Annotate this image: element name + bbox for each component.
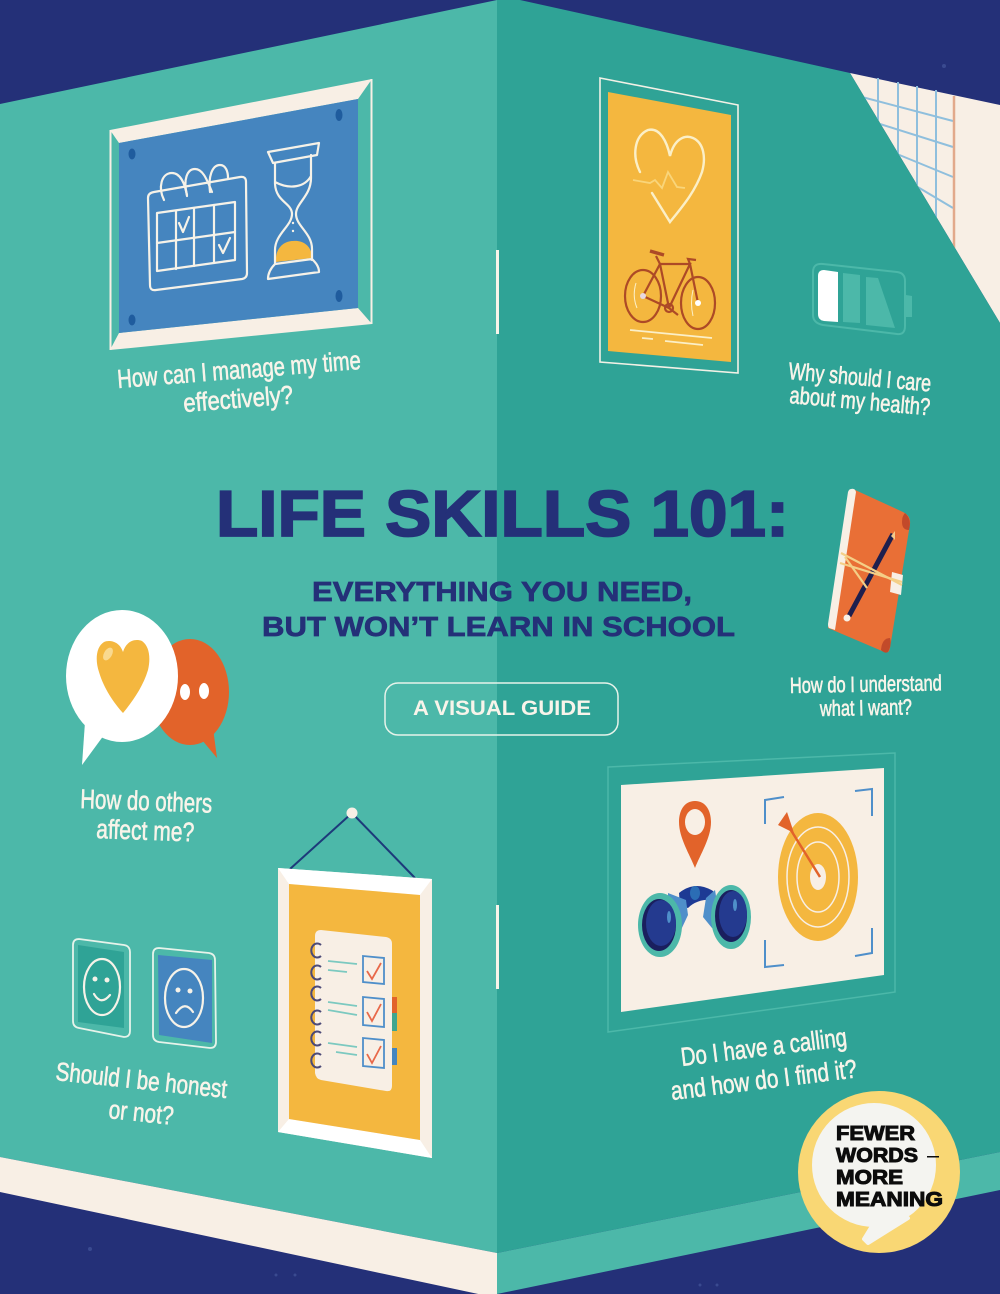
caption: others [80,784,213,847]
caption: what I want [790,670,942,721]
caption: what I want: How do I understand [790,670,942,698]
badge: fewer words more meaning [798,1091,960,1253]
caption: calling: and how do I find it? [669,1053,858,1106]
caption: time: How can I manage my time [116,345,362,394]
badge: fewer words more meaning: WORDS [836,1145,918,1167]
text lines [630,330,712,345]
color tabs [392,997,397,1065]
caption: health: Why should I care [787,358,932,397]
poster frame [608,753,895,1032]
caption: time: effectively? [182,379,294,418]
panel: calling poster [608,753,895,1032]
subtitle: EVERYTHING YOU NEED, [312,576,692,607]
caption: health [787,358,932,421]
subtitle: BUT WON’T LEARN IN SCHOOL [262,611,735,642]
caption: calling [669,1022,858,1106]
icon: speech bubbles [66,610,229,765]
panel: health poster [600,78,738,373]
caption: honest: Should I be honest [54,1056,229,1104]
poster frame [278,868,432,1158]
icon: heart with pulse [633,130,704,222]
panel: left wall [0,0,497,1253]
badge: fewer words more meaning: FEWER [836,1123,916,1145]
main title: LIFE SKILLS 101: [216,477,789,550]
badge: fewer words more meaning: MORE [836,1167,903,1189]
button: a visual guide [385,683,618,735]
poster frame [600,78,738,373]
right wall [497,0,1000,1253]
panel: time management poster [110,79,372,350]
badge: fewer words more meaning: MEANING [836,1189,943,1211]
sad card [153,948,216,1048]
focus brackets [765,789,872,967]
panel: checklist poster [278,808,432,1158]
title block [216,477,789,735]
caption: what I want: what I want? [819,694,912,721]
icon: smiling and sad faces [73,939,216,1048]
fold highlights [496,250,499,989]
caption: time [116,345,362,418]
icon: battery [813,264,912,334]
icon: location pin [679,801,711,868]
caption: others: affect me? [96,814,195,847]
icon: notebook [828,489,910,653]
icon: target with arrow [778,812,858,941]
checklist page [311,930,392,1091]
icon: bicycle [625,251,715,329]
caption: health: about my health? [788,382,931,421]
caption: others: How do others [80,784,213,819]
happy card [73,939,130,1037]
button: a visual guide: A VISUAL GUIDE [413,697,591,720]
floor strip: cream [0,1157,497,1294]
icon: binoculars [638,885,751,957]
icon: calendar [148,165,247,290]
icon: hourglass [268,143,319,279]
poster frame [110,79,372,350]
cream side wall with grid paper [850,73,1000,323]
hanging strings [290,808,415,878]
caption: calling: Do I have a calling [679,1022,848,1072]
floor strip: teal [497,1152,1000,1294]
subtitle [262,576,735,642]
caption: honest: or not? [107,1094,175,1131]
caption: honest [54,1056,229,1131]
